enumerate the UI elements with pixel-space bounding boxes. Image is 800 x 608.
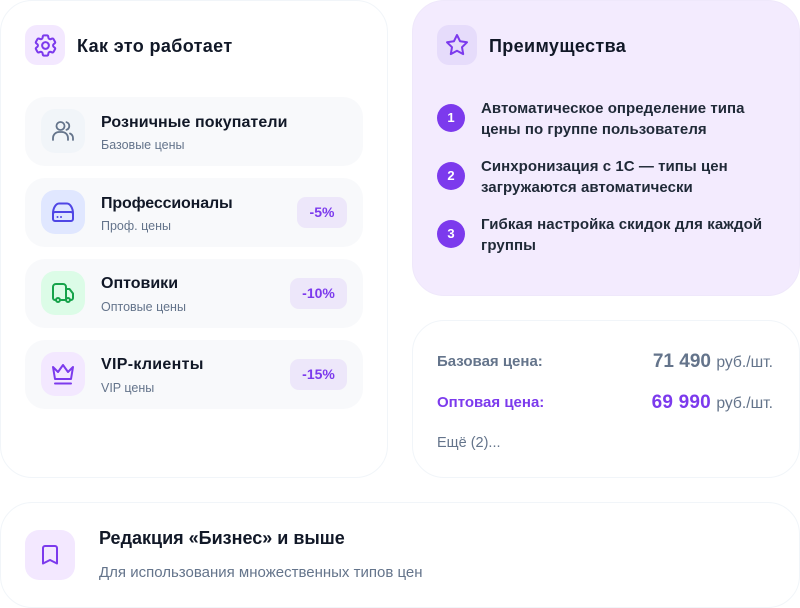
name: VIP-клиенты bbox=[101, 356, 204, 373]
badge 1 bbox=[437, 104, 465, 132]
badge 3: 3 bbox=[447, 226, 455, 241]
name: Розничные покупатели bbox=[101, 114, 288, 131]
advantage 1: цены по группе пользователя bbox=[481, 121, 707, 138]
row: wholesale bbox=[25, 259, 363, 328]
advantage 2: Синхронизация с 1С — типы цен bbox=[481, 158, 728, 175]
icon: truck bbox=[41, 271, 85, 315]
row: VIP bbox=[25, 340, 363, 409]
advantage 3 bbox=[481, 216, 762, 254]
base price label: Базовая цена: bbox=[437, 353, 543, 370]
icon: bookmark bbox=[25, 530, 75, 580]
row: retail bbox=[25, 97, 363, 166]
price type: Проф. цены bbox=[101, 219, 171, 233]
icon: users bbox=[41, 109, 85, 153]
row: professionals bbox=[25, 178, 363, 247]
wholesale price value: 69 990 руб./шт. bbox=[652, 392, 773, 413]
panel: how it works bbox=[0, 0, 388, 478]
discount badge bbox=[290, 278, 347, 309]
badge 3 bbox=[437, 220, 465, 248]
advantage 2: загружаются автоматически bbox=[481, 179, 693, 196]
name: Профессионалы bbox=[101, 195, 233, 212]
heading: Преимущества bbox=[489, 36, 626, 56]
badge 1: 1 bbox=[447, 110, 455, 125]
panel: price example bbox=[412, 320, 800, 478]
advantage 1 bbox=[481, 100, 745, 138]
icon: gear bbox=[25, 25, 65, 65]
discount badge: -10% bbox=[302, 285, 335, 301]
advantage 3: группы bbox=[481, 237, 536, 254]
icon: star bbox=[437, 25, 477, 65]
panel: edition note bbox=[0, 502, 800, 608]
icon: crown bbox=[41, 352, 85, 396]
description: Для использования множественных типов цен bbox=[99, 564, 423, 581]
discount badge: -15% bbox=[302, 366, 335, 382]
price type: Базовые цены bbox=[101, 138, 184, 152]
badge 2: 2 bbox=[447, 168, 455, 183]
discount badge bbox=[290, 359, 347, 390]
base price value: 71 490 руб./шт. bbox=[653, 351, 773, 372]
price type: VIP цены bbox=[101, 381, 154, 395]
wholesale price label: Оптовая цена: bbox=[437, 394, 544, 411]
heading: Как это работает bbox=[77, 36, 233, 56]
advantage 1: Автоматическое определение типа bbox=[481, 100, 745, 117]
name: Оптовики bbox=[101, 275, 178, 292]
more link: Ещё (2)... bbox=[437, 435, 501, 451]
panel: advantages bbox=[412, 0, 800, 296]
advantage 3: Гибкая настройка скидок для каждой bbox=[481, 216, 762, 233]
advantage 2 bbox=[481, 158, 728, 196]
badge 2 bbox=[437, 162, 465, 190]
title: Редакция «Бизнес» и выше bbox=[99, 528, 345, 548]
discount badge bbox=[297, 197, 347, 228]
icon: drive bbox=[41, 190, 85, 234]
price type: Оптовые цены bbox=[101, 300, 186, 314]
discount badge: -5% bbox=[310, 204, 334, 220]
